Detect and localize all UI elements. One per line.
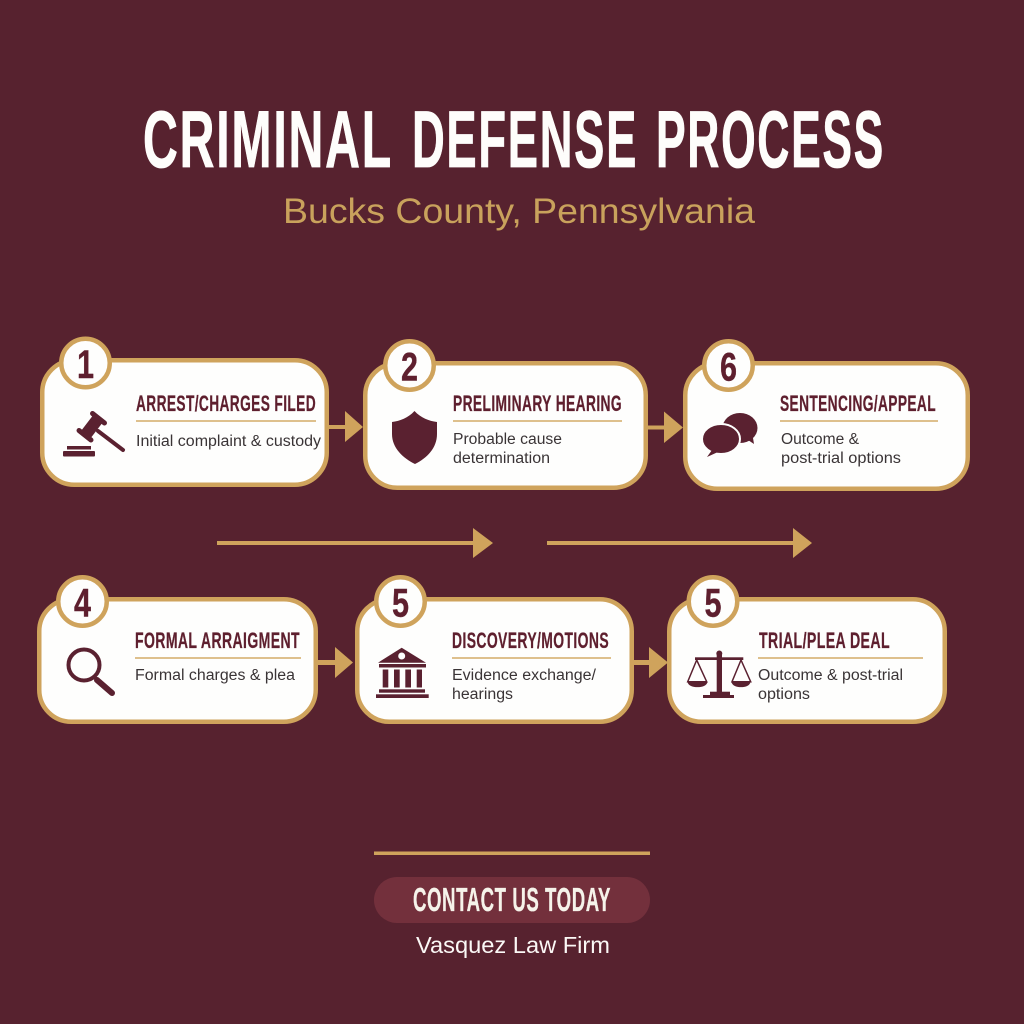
badge: number 5: 5 (704, 582, 722, 626)
description: hearings (452, 686, 513, 703)
heading: SENTENCING/APPEAL (780, 391, 936, 416)
badge: number 6: 6 (720, 346, 737, 390)
arrow: step 5 to trial step (633, 647, 668, 678)
heading: ARREST/CHARGES FILED (136, 391, 316, 416)
title (143, 95, 885, 185)
icon: gavel (63, 414, 123, 456)
panel: sentencing and appeal (685, 341, 968, 489)
icon: speech bubbles (702, 413, 758, 457)
button: contact us today (374, 877, 650, 923)
title: CRIMINAL (143, 95, 393, 185)
icon: magnifying glass (68, 650, 112, 693)
icon: scales of justice (688, 650, 751, 698)
panel: preliminary hearing (365, 341, 646, 488)
description: Formal charges & plea (135, 667, 295, 684)
description: Outcome & post-trial (758, 667, 903, 684)
panel: trial or plea deal (669, 577, 945, 722)
description (452, 667, 597, 703)
badge: number 4 (58, 577, 107, 626)
arrow: step 2 to step 6 (647, 412, 683, 443)
arrow: step 4 to step 5 (317, 647, 353, 678)
badge: number 5 (376, 577, 425, 626)
icon: shield (392, 411, 437, 464)
arrow: long connector right (547, 528, 812, 558)
badge: number 2: 2 (401, 346, 418, 390)
heading: PRELIMINARY HEARING (453, 391, 622, 416)
description (781, 431, 901, 467)
description (453, 431, 562, 467)
description: options (758, 686, 810, 703)
badge: number 6 (704, 341, 753, 390)
heading: FORMAL ARRAIGMENT (135, 628, 300, 653)
subtitle: Bucks County, Pennsylvania (283, 192, 756, 231)
description: Evidence exchange/ (452, 667, 597, 684)
description (758, 667, 903, 703)
badge: number 1 (61, 339, 110, 387)
panel: discovery and motions (357, 577, 632, 722)
description: Initial complaint & custody (136, 433, 321, 450)
badge: number 5 (689, 577, 737, 626)
heading: TRIAL/PLEA DEAL (759, 628, 890, 653)
panel: arrest and charges filed (42, 339, 327, 485)
badge: number 2 (385, 341, 434, 390)
footer divider line (374, 852, 650, 855)
description: Probable cause (453, 431, 562, 448)
icon: courthouse (376, 648, 429, 698)
badge: number 5: 5 (392, 582, 409, 626)
description: determination (453, 450, 550, 467)
arrow: long connector left (217, 528, 493, 558)
arrow: step 1 to step 2 (328, 411, 363, 442)
heading: DISCOVERY/MOTIONS (452, 628, 609, 653)
badge: number 1: 1 (77, 343, 94, 387)
badge: number 4: 4 (74, 582, 92, 626)
title: DEFENSE (412, 95, 638, 185)
description: Outcome & (781, 431, 860, 448)
description: post-trial options (781, 450, 901, 467)
firm name: Vasquez Law Firm (416, 932, 610, 958)
button: contact us today: CONTACT US TODAY (413, 881, 611, 918)
panel: formal arraignment (39, 577, 316, 722)
